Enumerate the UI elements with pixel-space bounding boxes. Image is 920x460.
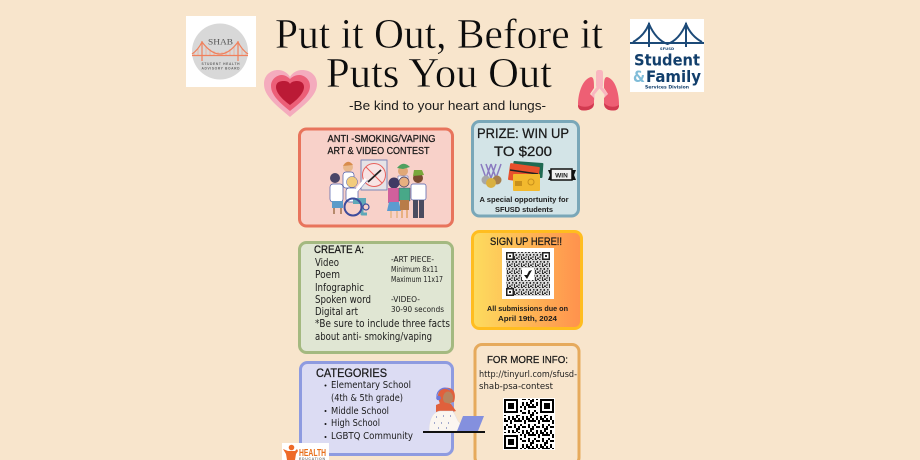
- icon: win badge: WIN: [555, 172, 568, 180]
- link: shab-psa-contest: [479, 382, 553, 392]
- list of formats: [315, 257, 371, 318]
- list of formats: Infographic: [315, 282, 364, 294]
- category list: Middle School: [331, 406, 389, 417]
- size requirements: [391, 255, 444, 314]
- prize note: [480, 197, 569, 214]
- prize note: A special opportunity for: [480, 197, 569, 204]
- logo: Student & Family: SFUSD: [660, 46, 674, 51]
- logo: Student & Family: &: [633, 67, 645, 86]
- title: [275, 12, 603, 97]
- logo: Student & Family: Student: [634, 50, 700, 70]
- icon: medals: [481, 164, 502, 188]
- subtitle: -Be kind to your heart and lungs-: [349, 98, 546, 113]
- logo: health education: [282, 443, 329, 460]
- facts note: *Be sure to include three facts: [315, 318, 450, 330]
- submission deadline: April 19th, 2024: [498, 314, 558, 323]
- logo: SHAB: SHAB: [208, 38, 233, 46]
- logo: SHAB: [186, 16, 256, 87]
- QR code: more info: [503, 398, 555, 450]
- prize heading: TO $200: [494, 143, 552, 159]
- size requirements: 30-90 seconds: [391, 305, 444, 314]
- category list: High School: [331, 418, 380, 429]
- category list: LGBTQ Community: [331, 431, 413, 442]
- logo: Student & Family: [630, 19, 704, 92]
- size requirements: Minimum 8x11: [391, 265, 438, 274]
- panel: prize: [472, 122, 578, 216]
- list of formats: Spoken word: [315, 294, 371, 306]
- icon: gift cards: [508, 161, 543, 191]
- title: Put it Out, Before it: [275, 12, 603, 58]
- panel: categories: [300, 362, 452, 454]
- logo: SHAB: STUDENT HEALTH: [202, 62, 240, 66]
- icon: lungs: [578, 70, 619, 110]
- icon: heart: [264, 70, 317, 117]
- size requirements: -VIDEO-: [391, 295, 420, 304]
- more info heading: FOR MORE INFO:: [487, 354, 568, 366]
- submission deadline: [487, 304, 568, 323]
- logo: Student & Family: Services Division: [645, 84, 689, 90]
- sign up heading: SIGN UP HERE!!: [490, 236, 562, 248]
- contest heading: ART & VIDEO CONTEST: [328, 146, 430, 157]
- logo: health education: HEALTH: [299, 448, 326, 459]
- link: http://tinyurl.com/sfusd-: [479, 370, 577, 380]
- category list: (4th & 5th grade): [331, 393, 403, 404]
- link: [479, 370, 577, 392]
- list of formats: Poem: [315, 269, 340, 281]
- category list: [324, 380, 413, 442]
- contest heading: [328, 134, 436, 157]
- submission deadline: All submissions due on: [487, 304, 568, 313]
- category list: Elementary School: [331, 380, 411, 391]
- QR code: sign up: [502, 248, 554, 299]
- panel: contest: [300, 129, 452, 226]
- size requirements: -ART PIECE-: [391, 255, 434, 264]
- logo: SHAB: ADVISORY BOARD: [202, 66, 240, 70]
- panel: create: [300, 242, 452, 352]
- title: Puts You Out: [326, 51, 552, 97]
- list of formats: Video: [315, 257, 339, 269]
- facts note: about anti- smoking/vaping: [315, 331, 432, 343]
- prize note: SFUSD students: [495, 207, 553, 214]
- create heading: CREATE A:: [314, 244, 364, 256]
- facts note: [315, 318, 450, 343]
- logo: Student & Family: Family: [646, 67, 702, 86]
- illustration: children with no-smoking sign: [330, 160, 426, 218]
- illustration: person at laptop: [423, 388, 485, 433]
- size requirements: Maximum 11x17: [391, 275, 443, 284]
- prize heading: PRIZE: WIN UP: [477, 125, 569, 141]
- panel: sign up: [472, 232, 582, 328]
- list of formats: Digital art: [315, 306, 358, 318]
- contest heading: ANTI -SMOKING/VAPING: [328, 134, 436, 145]
- prize heading: [477, 125, 569, 159]
- categories heading: CATEGORIES: [316, 366, 387, 380]
- panel: more info: [475, 344, 579, 460]
